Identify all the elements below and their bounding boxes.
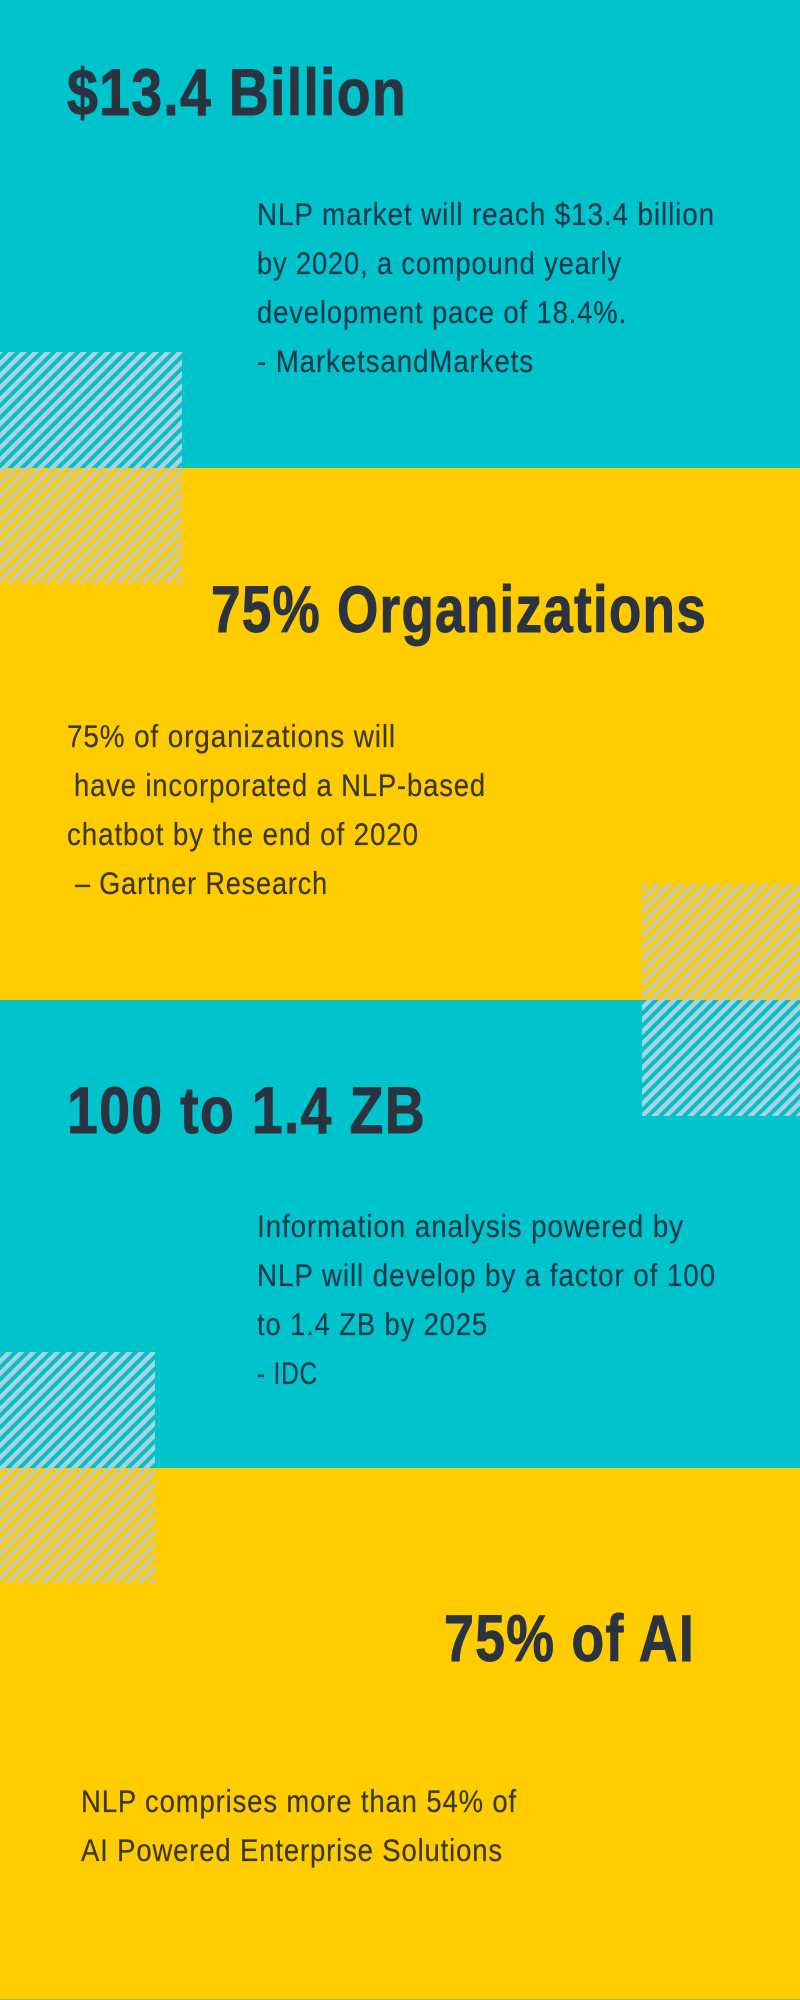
hatched square 2 [642, 884, 800, 1116]
text block: market statistic: development pace of 18.4%. [257, 294, 627, 330]
panel: yellow section 4 [0, 1468, 800, 2000]
text block: market statistic [257, 196, 715, 379]
text block: enterprise solutions statistic: AI Powered Enterprise Solutions [81, 1832, 503, 1868]
text block: chatbot statistic: chatbot by the end of 2020 [67, 816, 419, 852]
text block: market statistic: - MarketsandMarkets [257, 343, 534, 379]
text block: chatbot statistic: 75% of organizations will [67, 718, 396, 754]
panel: yellow section 2 [0, 468, 800, 1000]
text block: chatbot statistic: – Gartner Research [75, 865, 328, 901]
text block: enterprise solutions statistic: NLP comprises more than 54% of [81, 1783, 517, 1819]
text block: market statistic: NLP market will reach $13.4 billion [257, 196, 715, 232]
panel: teal section 1 [0, 0, 800, 468]
heading: $13.4 Billion: $13.4 Billion [67, 55, 407, 129]
hatched square 3 [0, 1352, 155, 1583]
text block: information analysis statistic: Information analysis powered by [257, 1208, 684, 1244]
text block: information analysis statistic [257, 1208, 716, 1391]
text block: chatbot statistic: have incorporated a NLP-based [74, 767, 486, 803]
text block: market statistic: by 2020, a compound yearly [257, 245, 622, 281]
panel: teal section 3 [0, 1000, 800, 1468]
text block: enterprise solutions statistic [81, 1783, 517, 1868]
heading: 75% of AI: 75% of AI [444, 1601, 695, 1675]
text block: information analysis statistic: - IDC [257, 1355, 318, 1391]
hatched square 1 [0, 352, 182, 583]
text block: chatbot statistic [67, 718, 486, 901]
text block: information analysis statistic: NLP will develop by a factor of 100 [257, 1257, 716, 1293]
heading: 100 to 1.4 ZB: 100 to 1.4 ZB [67, 1073, 426, 1147]
text block: information analysis statistic: to 1.4 ZB by 2025 [257, 1306, 488, 1342]
